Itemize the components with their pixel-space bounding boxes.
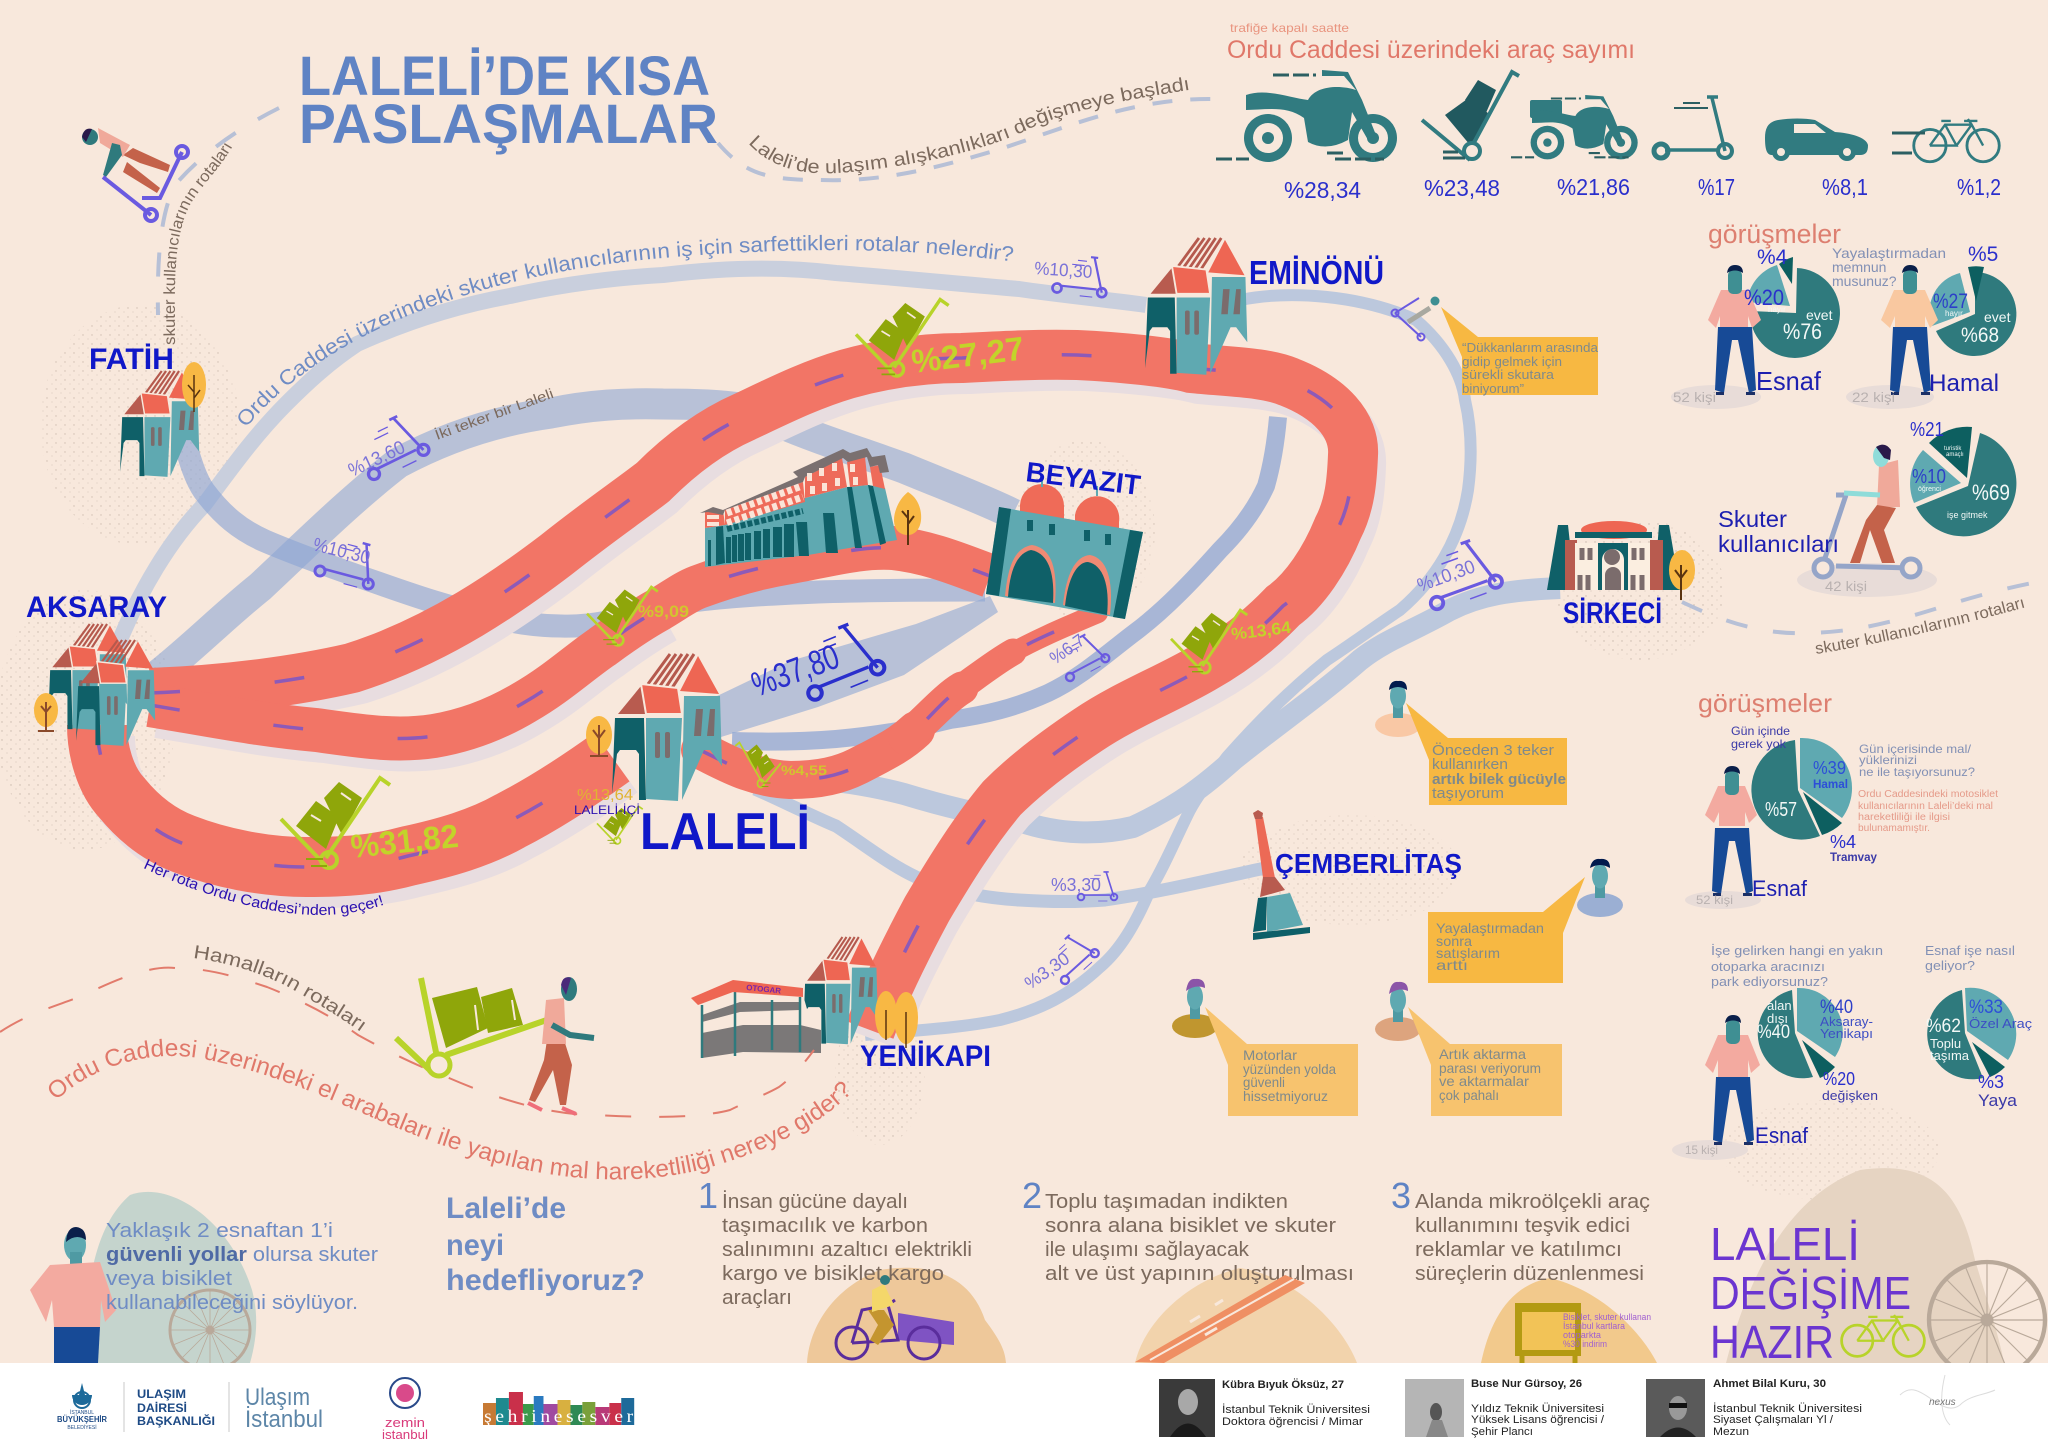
road percentages: %4,55 (781, 762, 827, 778)
icon: cargo bike (836, 1275, 954, 1359)
question: scooter routes: Ordu Caddesi üzerindeki skuter kullanıcılarının iş için sarfettikleri rotalar nelerdir? (238, 234, 1014, 424)
callout: aktarma: ve aktarmalar (1439, 1073, 1529, 1089)
icon: billboard (1515, 1303, 1651, 1365)
goal 2 (1022, 1175, 1354, 1285)
pie: commute (1927, 988, 2016, 1079)
callout: motorlar: yüzünden yolda (1243, 1061, 1336, 1077)
credit: Kübra (1159, 1378, 1370, 1437)
place labels: BEYAZIT (1024, 456, 1142, 501)
panel: interviews middle (1685, 688, 1998, 909)
heading: görüşmeler (1698, 688, 1832, 718)
panel: scooter users: %21 (1910, 419, 1944, 441)
icon: bicycle (1892, 119, 1999, 162)
logo: Şehrine sesver (483, 1392, 634, 1427)
icon: billboard: Bisiklet, skuter kullanan (1563, 1312, 1651, 1322)
panel: interviews middle: %4 (1830, 832, 1856, 852)
pie: otopark (1758, 988, 1843, 1078)
panel: scooter users: öğrenci (1918, 486, 1941, 493)
vehicle percentages: %1,2 (1957, 174, 2001, 200)
note: every route passes Ordu: Her rota Ordu Caddesi’nden geçer! (144, 859, 384, 916)
panel: scooter users: kullanıcıları (1718, 531, 1839, 557)
credit: Ahmet: İstanbul Teknik Üniversitesi (1713, 1402, 1862, 1415)
goal 3: reklamlar ve katılımcı (1415, 1239, 1622, 1261)
label: porter routes: Hamalların rotaları (194, 945, 366, 1031)
text: esnaf statement (106, 1220, 378, 1314)
callout: yayalaştırmadan sonra: satışlarım (1436, 945, 1500, 961)
icon: billboard: otoparkta (1563, 1330, 1601, 1340)
panel: interviews top: hayır (1945, 309, 1963, 318)
icon: bicycle wheels (170, 1262, 2045, 1378)
title: PASLAŞMALAR (299, 92, 718, 155)
panel: interviews middle: Esnaf (1752, 876, 1808, 901)
question: musunuz? (1832, 273, 1897, 289)
title (299, 44, 718, 155)
dark columns (708, 485, 886, 566)
goal 2: Toplu taşımadan indikten (1045, 1191, 1288, 1213)
question: Yayalaştırmadan (1832, 245, 1946, 261)
scooter icons with percentages: %10,30 (1415, 556, 1478, 597)
panel: interviews middle: kullanıcılarının Laleli’deki mal (1858, 801, 1993, 812)
callout: yayalaştırmadan sonra: Yayalaştırmadan (1436, 920, 1544, 936)
logo: Ulaşım İstanbul (245, 1384, 323, 1433)
icon: Fatih house (120, 371, 199, 477)
person: hamal (1846, 265, 1938, 409)
callout: motorlar: Motorlar (1243, 1047, 1297, 1063)
callout: dükkanlarım: sürekli skutara (1462, 368, 1554, 382)
teal body (705, 485, 897, 567)
goal 1 (698, 1175, 972, 1309)
credit: Buse: Şehir Plancı (1471, 1426, 1533, 1438)
goal 3: kullanımını teşvik edici (1415, 1215, 1630, 1237)
road: Aksaray to Beyazıt (150, 548, 990, 738)
icon: electric scooter (1654, 97, 1732, 158)
person: scooter rider (1797, 445, 1937, 597)
goal 2: sonra alana bisiklet ve skuter (1045, 1215, 1336, 1237)
panel: interviews top: hayır (1768, 305, 1786, 314)
panel: interviews bottom: geliyor? (1925, 958, 1975, 973)
goal 3 (1391, 1175, 1650, 1285)
logo: Ulaşım Dairesi (124, 1382, 229, 1432)
heading: vehicle count (1227, 21, 1635, 64)
curved dashed: porter routes (0, 968, 814, 1117)
goal 3: süreçlerin düzenlenmesi (1415, 1263, 1644, 1285)
logo: Zemin İstanbul: istanbul (382, 1427, 428, 1442)
panel: interviews top: 22 kişi (1852, 389, 1895, 405)
title: LALELİ’DE KISA (299, 44, 710, 107)
panel: interviews bottom: taşıma (1930, 1048, 1970, 1063)
logo: nexus (1900, 1375, 1995, 1425)
heading: görüşmeler (1708, 219, 1841, 249)
logo: Zemin İstanbul: zemin (385, 1415, 425, 1430)
vehicle percentages: %23,48 (1424, 175, 1500, 201)
vehicle percentages: %17 (1698, 174, 1735, 200)
credit: Buse: Yıldız Teknik Üniversitesi (1471, 1403, 1604, 1415)
panel: interviews top (1671, 219, 2016, 409)
panel: interviews middle: Hamal (1813, 777, 1848, 791)
panel: interviews bottom: otoparka aracınızı (1711, 959, 1825, 974)
panel: interviews bottom: dışı (1767, 1011, 1788, 1026)
panel: interviews top: %20 (1744, 285, 1784, 310)
icon: motorcycle (1216, 70, 1397, 162)
callout: yayalaştırmadan sonra: arttı (1436, 957, 1468, 973)
road percentages (349, 329, 1293, 865)
icon: green bicycle (1842, 1315, 1924, 1356)
panel: interviews top: %76 (1783, 319, 1822, 344)
person: esnaf (1685, 766, 1761, 909)
pie: skuter (1910, 427, 2016, 536)
goal 3: Alanda mikroölçekli araç (1415, 1191, 1650, 1213)
panel: interviews top: %68 (1961, 324, 1999, 347)
footer band (0, 1363, 2048, 1449)
panel: interviews bottom: Aksaray- (1820, 1014, 1873, 1029)
text: esnaf statement: kullanabileceğini söylüyor. (106, 1292, 358, 1314)
icon: Laleli house (586, 654, 722, 801)
text: esnaf statement: veya bisiklet (106, 1268, 233, 1290)
logo: Ulaşım Dairesi: ULAŞIM (137, 1387, 186, 1401)
road lane dashes (97, 355, 1353, 1030)
panel: interviews bottom: %40 (1757, 1022, 1790, 1043)
icon: billboard: %30 indirim (1563, 1339, 1607, 1349)
callout: dükkanlarım (1392, 296, 1598, 396)
carts on roads (281, 300, 1247, 868)
credit: Kübra: İstanbul Teknik Üniversitesi (1222, 1403, 1370, 1416)
bottom blobs (85, 1168, 2004, 1363)
slogan: DEĞİŞİME (1710, 1267, 1911, 1319)
panel: interviews bottom: Toplu (1930, 1036, 1961, 1051)
credit: Ahmet: Mezun (1713, 1426, 1749, 1438)
panel: interviews middle: Ordu Caddesindeki motosiklet (1858, 789, 1998, 800)
icon: hand truck (1422, 72, 1519, 160)
callout: önceden 3 teker: taşıyorum (1432, 785, 1504, 802)
central university building (700, 448, 897, 567)
decorative dashed route top (158, 108, 279, 315)
callout: aktarma: Artık aktarma (1439, 1046, 1526, 1062)
heading: goals (446, 1192, 645, 1297)
scooter rider top left (82, 128, 188, 221)
scooter icons with percentages: %6,7 (1046, 630, 1088, 668)
panel: interviews bottom: Özel Araç (1969, 1016, 2033, 1031)
panel: interviews top: evet (1806, 307, 1833, 323)
panel: interviews bottom: %33 (1969, 997, 2003, 1018)
panel: scooter users: turistik (1944, 446, 1962, 452)
icon: bike lane (1135, 1275, 1305, 1363)
place labels: FATİH (89, 343, 174, 376)
heading: goals: neyi (446, 1229, 504, 1262)
panel: interviews middle: Gün içerisinde mal/ (1859, 742, 1972, 756)
credit: Kübra: Kübra Bıyuk Öksüz, 27 (1222, 1378, 1344, 1391)
pie: hamal (1929, 266, 2016, 356)
text: esnaf statement: güvenli yollar olursa skuter (106, 1244, 378, 1266)
road: Aksaray to Eminönü to Yenikapı (150, 355, 1353, 1030)
panel: scooter users: %10 (1912, 466, 1946, 488)
callout: yayalaştırmadan sonra (1428, 859, 1623, 983)
panel: interviews bottom: 15 kişi (1685, 1143, 1718, 1157)
panel: scooter users: 42 kişi (1825, 578, 1867, 594)
place labels: SİRKECİ (1563, 597, 1662, 630)
label: scooter routes right: skuter kullanıcılarının rotaları (1816, 599, 2024, 654)
callout: aktarma (1375, 982, 1562, 1116)
scooter icons with percentages: %13,60 (345, 437, 408, 482)
panel: interviews middle: 52 kişi (1696, 893, 1733, 907)
callout: motorlar (1172, 979, 1358, 1116)
credit: Kübra: Doktora öğrencisi / Mimar (1222, 1416, 1363, 1428)
goal 1: salınımını azaltıcı elektrikli (722, 1239, 972, 1261)
panel: interviews bottom: %40 (1820, 997, 1853, 1018)
vehicle percentages (1284, 174, 2001, 203)
callout: önceden 3 teker: Önceden 3 teker (1432, 741, 1554, 759)
callout: dükkanlarım: gidip gelmek için (1462, 355, 1562, 369)
scooter icons with percentages: %10,30 (1034, 258, 1093, 282)
road percentages: %27,27 (909, 329, 1026, 380)
slogan: LALELİ (1710, 1218, 1860, 1270)
goal 2: ile ulaşımı sağlayacak (1045, 1239, 1250, 1261)
panel: scooter route bands (117, 269, 1560, 1035)
credit: Buse: Yüksek Lisans öğrencisi / (1471, 1414, 1605, 1426)
icon: Aksaray houses (34, 624, 155, 746)
panel: interviews top: Esnaf (1756, 366, 1822, 396)
goal 1: kargo ve bisiklet kargo (722, 1263, 944, 1285)
panel: interviews bottom: %62 (1926, 1016, 1961, 1037)
heading: goals: Laleli’de (446, 1192, 566, 1225)
panel: interviews top: 52 kişi (1673, 389, 1716, 405)
icon: Yenikapı trees (875, 991, 918, 1048)
tree by university (894, 492, 921, 545)
panel: interviews middle: %57 (1765, 799, 1797, 821)
text: esnaf statement: Yaklaşık 2 esnaftan 1’i (106, 1220, 333, 1242)
pie: esnaf (1747, 257, 1840, 358)
panel: interviews bottom: değişken (1822, 1088, 1878, 1103)
label: Laleli-içi: LALELİ-İÇİ (574, 803, 640, 817)
place labels: EMİNÖNÜ (1249, 254, 1384, 291)
logo: IBB: İSTANBUL (70, 1409, 94, 1416)
goal 1: İnsan gücüne dayalı (722, 1190, 908, 1213)
vehicle percentages: %8,1 (1822, 174, 1868, 200)
scooter icons with percentages: %3,30 (1021, 948, 1073, 993)
goal 2: 2 (1022, 1175, 1042, 1216)
road: Laleli to Beyazıt (700, 613, 1098, 780)
windows (707, 463, 858, 526)
panel: interviews middle: Gün içinde (1731, 724, 1790, 738)
panel: interviews bottom: Yaya (1978, 1091, 2018, 1110)
panel: interviews middle: yüklerinizi (1859, 753, 1917, 767)
place labels (26, 254, 1662, 1073)
panel: interviews bottom: alan (1767, 998, 1792, 1013)
goal 1: 1 (698, 1175, 718, 1216)
panel: scooter users: amaçlı (1946, 452, 1964, 458)
callout: önceden 3 teker: artık bilek gücüyle (1432, 771, 1566, 788)
heading: vehicle count: trafiğe kapalı saatte (1230, 21, 1349, 35)
panel: interviews bottom: %3 (1978, 1072, 2004, 1092)
slogan: HAZIR (1710, 1316, 1834, 1368)
scooter icons with percentages: %37,80 (746, 637, 844, 705)
vehicle percentages: %21,86 (1557, 174, 1630, 200)
icon: Yenikapı house (803, 937, 878, 1044)
panel: interviews middle: ne ile taşıyorsunuz? (1859, 765, 1975, 779)
logo: Ulaşım Dairesi: BAŞKANLIĞI (137, 1413, 215, 1428)
icon: courier motorcycle (1511, 95, 1638, 159)
logo: Ulaşım İstanbul: Ulaşım (245, 1384, 310, 1411)
panel: interviews bottom: park ediyorsunuz? (1711, 974, 1828, 989)
goal 1: taşımacılık ve karbon (722, 1215, 928, 1237)
callout: dükkanlarım: biniyorum” (1462, 382, 1524, 396)
panel: interviews top: evet (1984, 309, 2011, 325)
icon: Eminönü house (1145, 238, 1247, 375)
credit: Ahmet: Siyaset Çalışmaları Yl / (1713, 1414, 1834, 1426)
callout: önceden 3 teker: kullanırken (1432, 756, 1508, 773)
question: memnun (1832, 259, 1886, 275)
logo: IBB: BÜYÜKŞEHİR (57, 1415, 107, 1424)
credit: Ahmet: Ahmet Bilal Kuru, 30 (1713, 1378, 1826, 1390)
goal 1: araçları (722, 1287, 792, 1309)
credit: Buse (1405, 1378, 1605, 1438)
panel: interviews bottom: Yenikapı (1820, 1026, 1873, 1041)
logo: Zemin İstanbul (382, 1378, 428, 1442)
panel: interviews bottom: %20 (1823, 1069, 1855, 1089)
label: iki teker bir Laleli: İki teker bir Laleli (432, 384, 555, 443)
heading: goals: hedefliyoruz? (446, 1264, 645, 1297)
icon: car (1765, 118, 1868, 161)
panel: interviews middle: %39 (1813, 758, 1846, 778)
callout: yayalaştırmadan sonra: sonra (1436, 933, 1472, 949)
person: big esnaf (30, 1227, 116, 1363)
road percentages: %13,64 (1230, 618, 1293, 644)
logo: nexus: nexus (1929, 1397, 1956, 1408)
place labels: AKSARAY (26, 591, 167, 624)
panel: hamal road routes (97, 355, 1353, 1030)
panel: interviews middle: bulunamamıştır. (1858, 823, 1930, 834)
callout: motorlar: hissetmiyoruz (1243, 1088, 1328, 1104)
panel: scooter users: Skuter (1718, 506, 1787, 532)
curved label: scooter routes left: skuter kullanıcılarının rotaları (163, 143, 232, 344)
person: esnaf (1672, 1015, 1760, 1160)
panel: interviews top: %5 (1968, 243, 1998, 266)
panel: interviews bottom: Esnaf işe nasıl (1925, 943, 2015, 958)
callout: motorlar: güvenli (1243, 1074, 1285, 1090)
callout: aktarma: çok pahalı (1439, 1087, 1499, 1103)
logo: Şehrine sesver: şehrinesesver (484, 1407, 634, 1427)
label: Laleli-içi (574, 787, 640, 817)
place labels: YENİKAPI (860, 1040, 991, 1073)
panel: interviews middle: hareketliliği ile ilgisi (1858, 812, 1950, 823)
person: esnaf (1671, 265, 1761, 409)
slogan (1710, 1218, 1911, 1368)
question: hand carts: Ordu Caddesi üzerindeki el arabaları ile yapılan mal hareketliliği nereye gider? (48, 1038, 849, 1180)
callout: önceden 3 teker (1375, 681, 1567, 805)
icon: Sirkeci station (1547, 521, 1695, 600)
panel: interviews bottom (1672, 943, 2033, 1160)
icon: Otogar (691, 980, 821, 1058)
place labels: LALELİ (640, 803, 810, 861)
credit: Buse: Buse Nur Gürsoy, 26 (1471, 1378, 1582, 1390)
heading: vehicle count: Ordu Caddesi üzerindeki araç sayımı (1227, 36, 1635, 64)
panel: interviews middle: gerek yok (1731, 737, 1787, 751)
road: Aksaray to Laleli (97, 725, 612, 867)
goal 3: 3 (1391, 1175, 1411, 1216)
icon: Çemberlitaş column (1253, 810, 1310, 940)
panel: interviews middle: Tramvay (1830, 850, 1877, 864)
callout: dükkanlarım: “Dükkanlarım arasında (1462, 341, 1598, 355)
panel: interviews top: Hamal (1929, 370, 1999, 397)
road percentages: %31,82 (349, 817, 460, 865)
scooter icons with percentages (311, 254, 1504, 993)
place labels: ÇEMBERLİTAŞ (1275, 848, 1462, 879)
logo: Ulaşım İstanbul: İstanbul (245, 1406, 323, 1433)
porter with cart (396, 977, 594, 1114)
icon: billboard: İstanbul kartlara (1563, 1321, 1625, 1331)
icon: Beyazıt mosque (986, 478, 1143, 619)
logo: IBB (57, 1383, 107, 1431)
vehicle percentages: %28,34 (1284, 177, 1361, 203)
panel: interviews top: %27 (1933, 290, 1968, 313)
logo: IBB: BELEDİYESİ (67, 1424, 97, 1431)
panel: interviews bottom: İşe gelirken hangi en yakın (1711, 943, 1883, 958)
stipple textures (0, 305, 1940, 1200)
credit: Ahmet (1646, 1378, 1862, 1438)
scooter icons with percentages: %3,30 (1051, 875, 1101, 895)
panel: interviews bottom: Esnaf (1755, 1123, 1809, 1148)
logo: Ulaşım Dairesi: DAİRESİ (137, 1400, 187, 1415)
pie: taşıma (1751, 738, 1852, 840)
panel: scooter users (1718, 419, 2016, 597)
road percentages: %9,09 (638, 602, 689, 621)
panel: interviews top: %4 (1757, 246, 1788, 269)
goal 2: alt ve üst yapının oluşturulması (1045, 1263, 1354, 1285)
callout: aktarma: parası veriyorum (1439, 1060, 1541, 1076)
panel: road shadows (105, 366, 1361, 1041)
icon: Fatih tree (182, 362, 206, 412)
panel: scooter users: işe gitmek (1947, 510, 1988, 520)
subtitle curved: habits: Laleli’de ulaşım alışkanlıkları değişmeye başladı (749, 77, 1188, 176)
grey roof (700, 448, 889, 515)
red upper floors (705, 510, 725, 528)
panel: scooter users: %69 (1972, 480, 2010, 505)
scooter icons with percentages: %10,30 (311, 534, 372, 569)
icon: Otogar: OTOGAR (746, 983, 782, 996)
question (1832, 245, 1946, 289)
label: Laleli-içi: %13,64 (577, 787, 633, 804)
